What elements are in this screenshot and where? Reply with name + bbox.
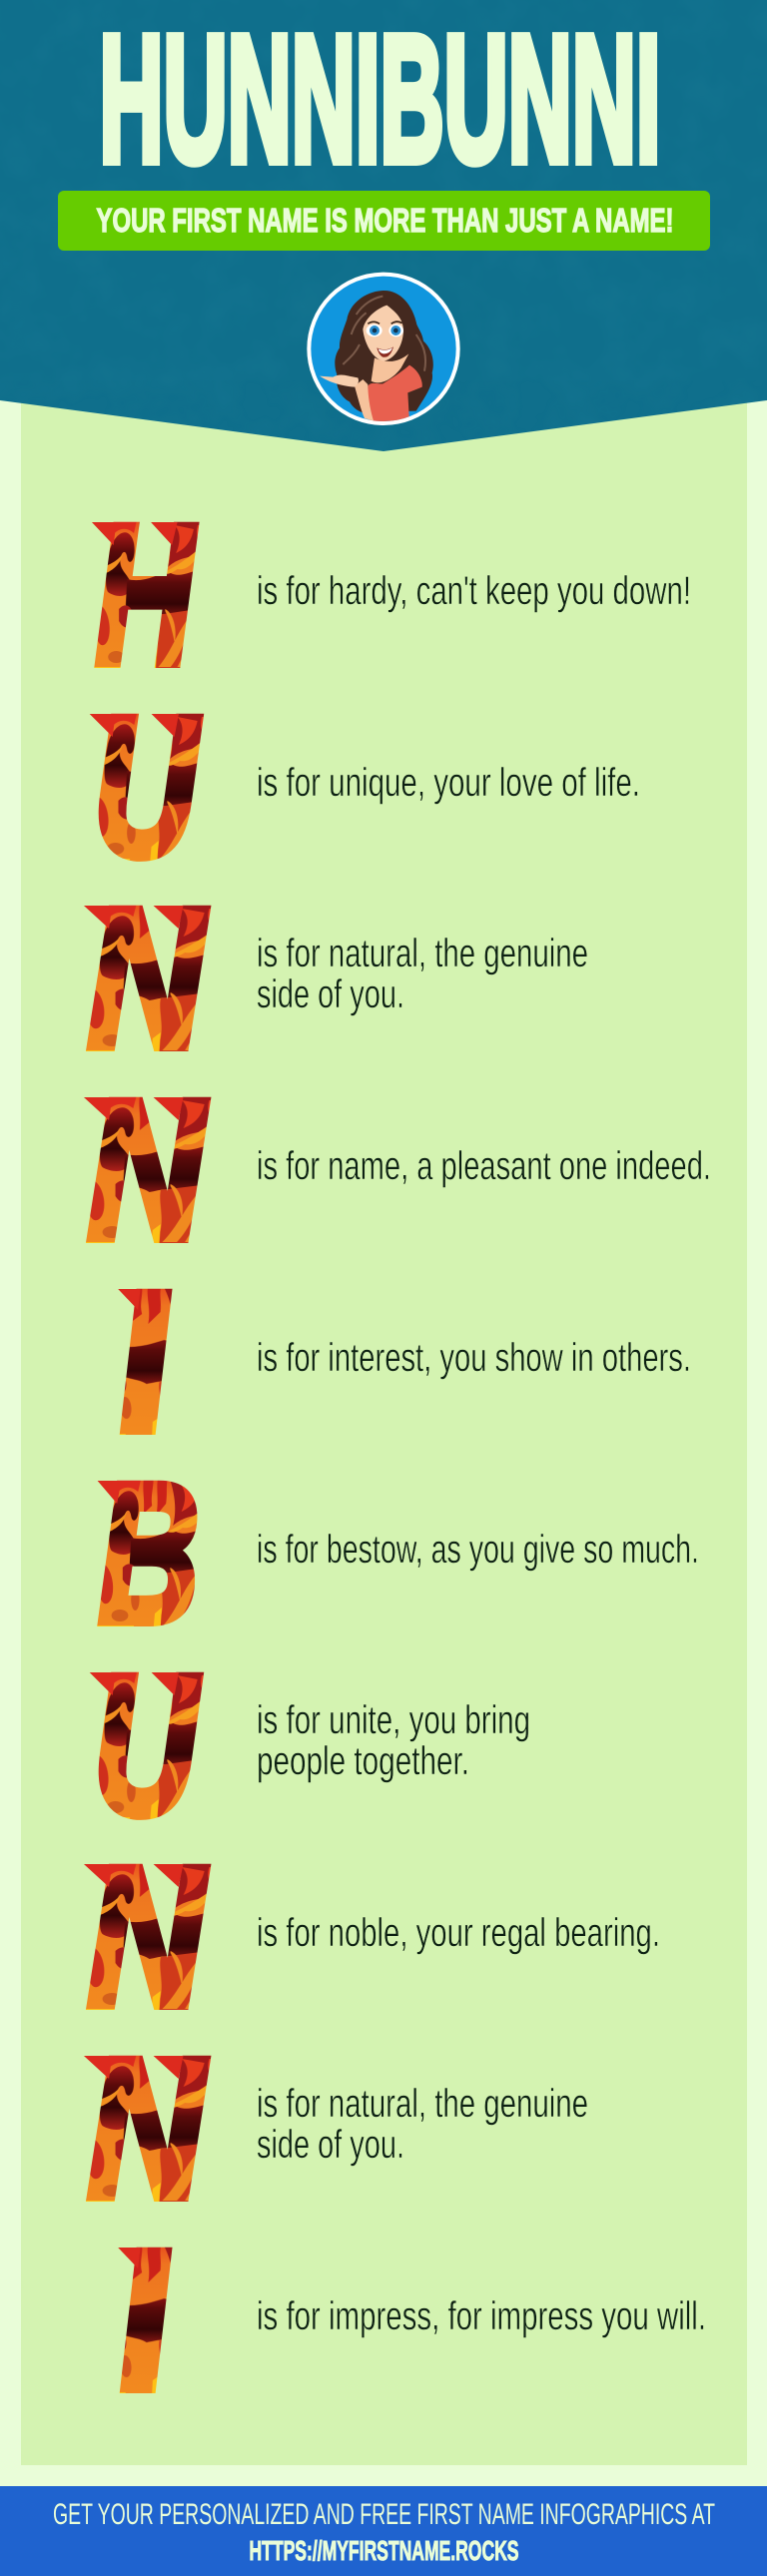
row: N third	[84, 1827, 660, 2048]
panel: footer	[0, 2486, 767, 2576]
text line U: is for unite, you bring	[257, 1698, 530, 1742]
text line: side of you: side of you.	[257, 2123, 404, 2167]
row: I second	[110, 2210, 706, 2430]
panel: teal header with chevron	[0, 0, 767, 459]
row: N second	[84, 1060, 711, 1281]
flame letter N: N	[88, 1060, 207, 1281]
panel: inner content background	[21, 379, 747, 2465]
row: N	[84, 869, 588, 1089]
row: U	[90, 676, 640, 897]
text line N: is for natural, the genuine	[257, 2082, 588, 2126]
footer background	[0, 2486, 767, 2576]
flame letter B: B	[99, 1444, 199, 1664]
flame letter N: N	[88, 869, 207, 1089]
avatar figure	[320, 291, 433, 422]
flame letter I: I	[110, 1251, 179, 1472]
footer line 2: URL: HTTPS://MYFIRSTNAME.ROCKS	[250, 2535, 519, 2566]
banner background	[58, 191, 710, 251]
flame letter I: I	[110, 2210, 179, 2430]
avatar circle	[309, 275, 458, 423]
flame letter U: U	[94, 1634, 201, 1855]
row: H	[92, 484, 691, 705]
text line: side of you: side of you.	[257, 972, 404, 1016]
row: U second	[90, 1634, 530, 1855]
flame letter U: U	[94, 676, 201, 897]
text line: is for natural: is for natural, the genuine	[257, 932, 588, 975]
row: I	[110, 1251, 691, 1472]
row: N fourth	[84, 2019, 588, 2240]
flame letter N: N	[88, 2019, 207, 2240]
row: B	[98, 1444, 699, 1664]
flame letter N: N	[88, 1827, 207, 2048]
text line U: is for unique, your love of life.	[257, 761, 640, 805]
banner: tagline	[58, 191, 710, 251]
text line: people together: people together.	[257, 1739, 469, 1783]
icon: avatar of smiling woman	[309, 275, 458, 423]
flame letter H: H	[96, 484, 196, 705]
